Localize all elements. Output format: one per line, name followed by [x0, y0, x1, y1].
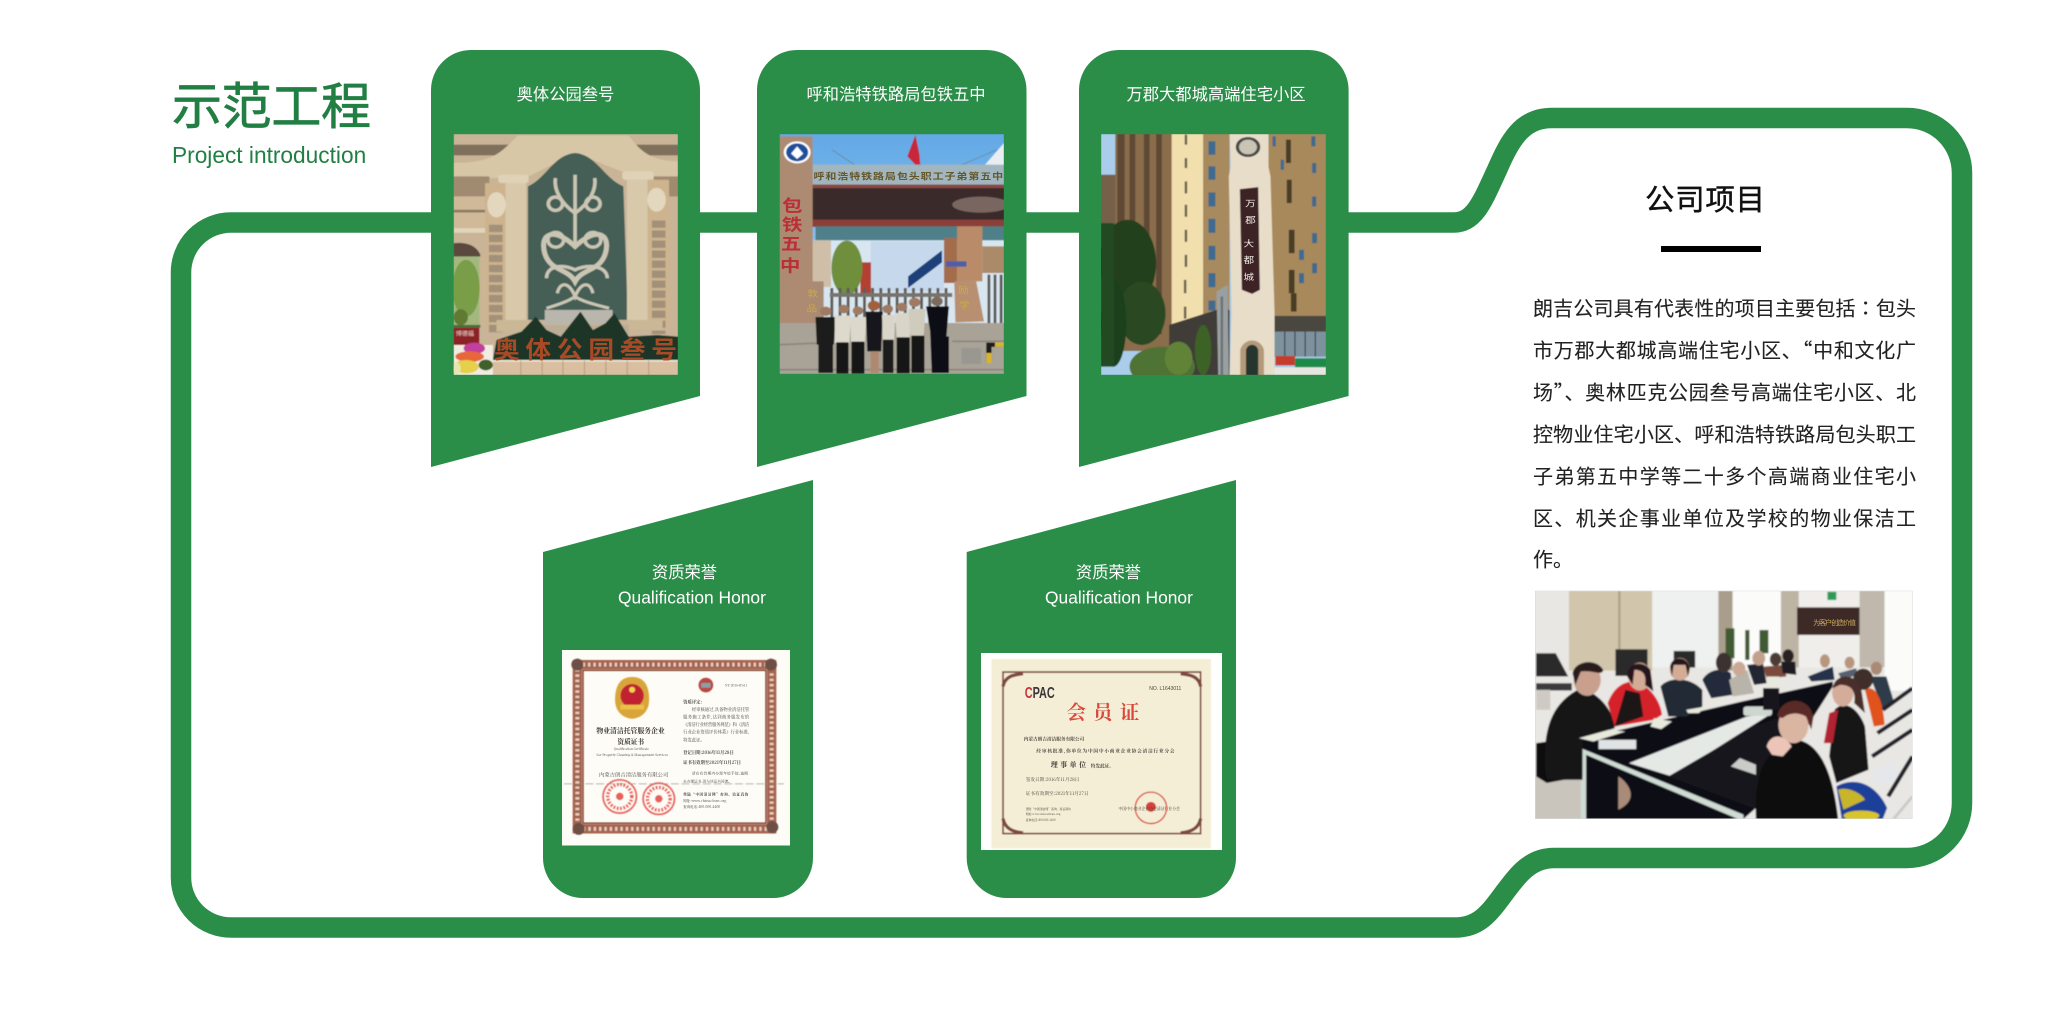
chairs back: [1536, 649, 1695, 677]
card shape: [543, 480, 813, 898]
body paragraph: 子弟第五中学等二十多个高端商业住宅小: [1533, 460, 1916, 489]
panel: qualification honor right: [967, 480, 1236, 898]
card subheading: Qualification Honor: [618, 588, 766, 608]
photo pillar mottoes: 励: [958, 283, 969, 296]
certificate text: 特发此证。: [683, 737, 705, 744]
photo pillar mottoes: 敦: [807, 286, 818, 299]
photo: school gate with staff: [780, 134, 1004, 374]
certificate text: [596, 683, 750, 810]
body paragraph: [1533, 293, 1916, 573]
photo tower plaque text: 郡: [1245, 213, 1256, 226]
body paragraph: 朗吉公司具有代表性的项目主要包括:包头: [1533, 293, 1916, 322]
photo tower plaque text: 城: [1244, 270, 1254, 283]
photo sign text: 奥体公园叁号: [494, 331, 677, 366]
certificate text: NY-20164Y611: [725, 683, 747, 688]
certificate text: For Property Cleaning & Management Services: [596, 752, 669, 757]
body paragraph: 区、机关企事业单位及学校的物业保洁工: [1533, 502, 1916, 531]
certificate text: 经审核批准,你单位为中国中小商业企业协会清洁行业分会: [1036, 748, 1175, 755]
card heading: 资质荣誉: [1076, 559, 1141, 583]
certificate text: 资质证书: [617, 736, 644, 746]
right side chairs: [1872, 688, 1912, 796]
photo tower plaque text: 大: [1244, 237, 1254, 249]
photo tower plaque text: [1244, 197, 1256, 283]
photo pillar mottoes: 学: [959, 298, 970, 311]
certificate text: 内蒙古朗吉清洁服务有限公司: [1024, 735, 1085, 742]
body paragraph: 场”、奥林匹克公园叁号高端住宅小区、北: [1533, 377, 1916, 406]
certificate text: 网址:www.chinaclean.org: [1026, 812, 1061, 816]
certificate text: 行业企业资质评价体系》行业标准,: [683, 729, 749, 736]
certificate text: CPAC: [1025, 685, 1055, 702]
staff figures: [816, 297, 949, 374]
certificate text: 资质评定:: [683, 698, 702, 705]
body paragraph: 市万郡大都城高端住宅小区、“中和文化广: [1533, 335, 1916, 364]
card caption: 奥体公园叁号: [517, 81, 614, 105]
certificate text: 查询电话:400-000-4400: [1026, 818, 1056, 822]
photo: ornamental park gate: 博德福: [456, 329, 474, 337]
certificate text: 签发日期:2016年11月28日: [1026, 776, 1079, 783]
certificate text: 内蒙古朗吉清洁服务有限公司: [599, 770, 668, 778]
certificate text: [1024, 685, 1182, 822]
certificate text: NO. L1643011: [1149, 686, 1182, 692]
photo pillar inscription: [780, 193, 803, 277]
card shape: [431, 50, 700, 467]
photo pillar inscription: 中: [780, 253, 800, 277]
certificate text: 登记日期:2016年11月28日: [683, 749, 734, 756]
panel: company projects: [1533, 177, 1916, 821]
photo: ornamental park gate: [454, 134, 678, 375]
photo: staff meeting: [1535, 590, 1912, 819]
certificate text: Qualification Certificate: [614, 747, 649, 751]
certificate text: 查询电话:400-000-4400: [683, 804, 720, 810]
body paragraph: 作。: [1533, 544, 1573, 573]
card caption: 万郡大都城高端住宅小区: [1126, 81, 1306, 105]
emblem: [615, 677, 649, 719]
card shape: [757, 50, 1026, 467]
title: chinese: 示范工程: [172, 67, 371, 139]
meeting room sign text: 为客户创造价值: [1813, 617, 1856, 627]
photo tower plaque text: 万: [1245, 197, 1256, 209]
card shape: [1079, 50, 1349, 467]
certificate text: 理事单位: [1051, 760, 1086, 770]
certificate text: 登陆“中国清洁网”查询、验证真伪: [683, 791, 749, 797]
title: [172, 67, 371, 168]
panel: 呼和浩特铁路局包铁五中: [757, 50, 1026, 467]
photo pillar inscription: 五: [781, 231, 801, 255]
certificate text: 会员证: [1066, 697, 1139, 725]
certificate text: 中国中小商业企业协会清洁行业分会: [1119, 806, 1180, 812]
card heading: 资质荣誉: [652, 559, 717, 583]
card shape: [967, 480, 1236, 898]
panel: qualification honor left: [543, 480, 813, 898]
certificate text: 特发此证。: [1091, 763, 1114, 770]
photo tower plaque text: 都: [1244, 253, 1254, 266]
photo: residential clock tower: [1101, 134, 1326, 375]
panel heading: 公司项目: [1645, 177, 1765, 219]
certificate text: 证书有效期至2021年11月27日: [683, 759, 741, 766]
certificate text: 物业清洁托管服务企业: [596, 725, 665, 735]
certificate: property cleaning qualification: [562, 650, 790, 846]
papers and projector: [1579, 677, 1779, 741]
title: english: Project introduction: [172, 142, 366, 168]
connecting green outline: [181, 118, 1962, 928]
certificate: CPAC membership: [981, 653, 1222, 850]
certificate text: 网址:www.chinaclean.org: [683, 798, 726, 804]
certificate text: 《清洁行业经营服务规范》和《清洁: [683, 721, 750, 728]
body paragraph: 控物业住宅小区、呼和浩特铁路局包头职工: [1533, 419, 1916, 448]
certificate text: 经审核通过,具备物业清洁托管: [692, 706, 750, 713]
people: [1545, 649, 1899, 821]
photo gate inscription: 呼和浩特铁路局包头职工子弟第五中: [813, 169, 1003, 182]
certificate text: 登陆“中国清洁网”查询、验证真伪: [1026, 807, 1071, 811]
certificate text: 证书有效期至:2021年11月27日: [1026, 790, 1089, 797]
photo pillar mottoes: [807, 283, 970, 314]
heading underline: [1661, 246, 1761, 252]
card caption: 呼和浩特铁路局包铁五中: [806, 81, 986, 105]
floor and table: [1535, 776, 1585, 819]
photo pillar inscription: 铁: [782, 212, 803, 236]
panel: 万郡大都城高端住宅小区: [1079, 50, 1349, 467]
certificate text: 未办理证书,须与该证书同流。: [683, 778, 732, 784]
certificate text: 服务施工条件,达到商务服发布的: [683, 714, 750, 721]
card subheading: Qualification Honor: [1045, 588, 1193, 608]
certificate text: 请在有效期内办理年检手续,逾期: [692, 770, 748, 776]
photo pillar mottoes: 品: [807, 301, 817, 314]
panel: 奥体公园叁号: [431, 50, 700, 467]
photo pillar inscription: 包: [782, 193, 803, 217]
